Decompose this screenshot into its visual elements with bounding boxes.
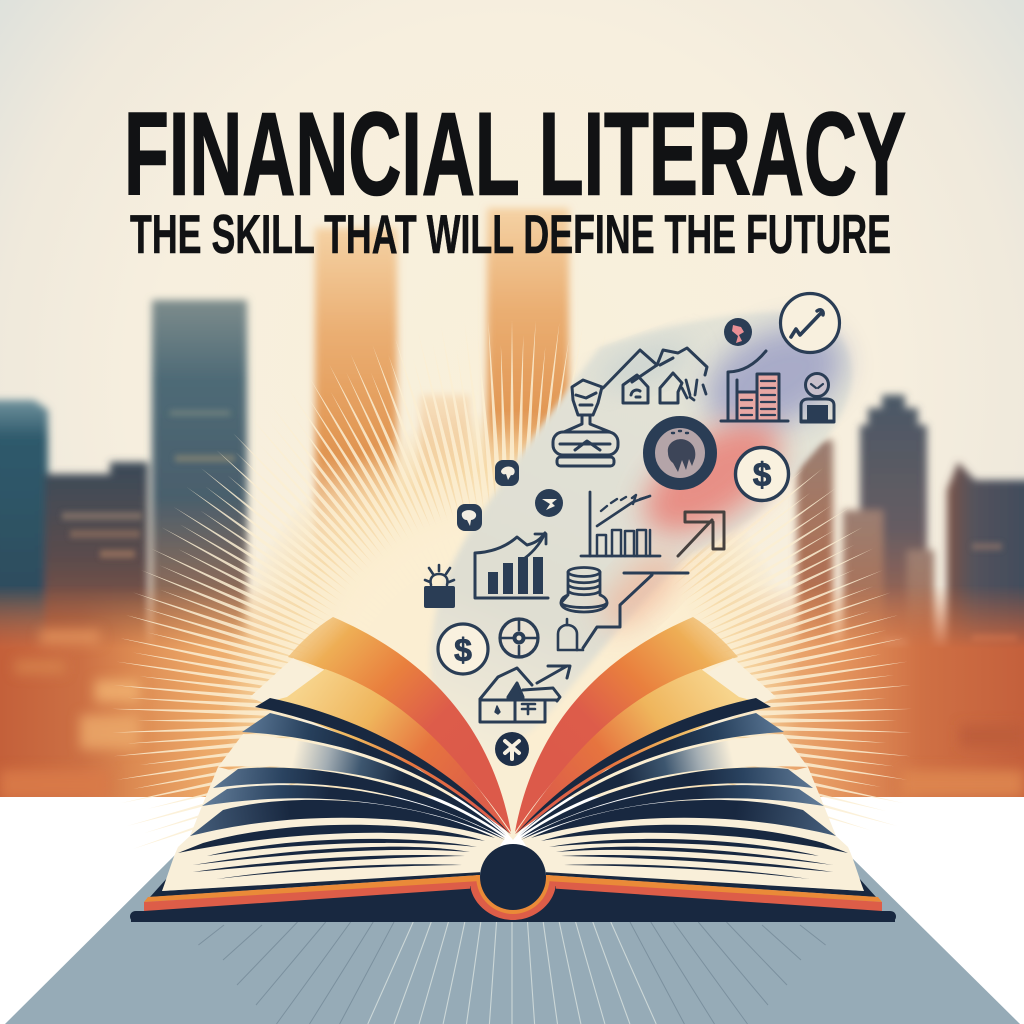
- open book: [130, 617, 896, 922]
- icon: houses: [603, 348, 707, 403]
- icon: growth circle: [780, 294, 840, 352]
- building window lights: [62, 410, 1017, 643]
- blurred city skyline: [0, 208, 1024, 690]
- spine: [470, 844, 556, 920]
- icon: person on book stack: [553, 380, 618, 466]
- icon: dollar coin top: [736, 448, 788, 500]
- table lines: centre: [368, 922, 656, 1024]
- warm city-light band: [0, 585, 1024, 797]
- icon: person at laptop: [801, 374, 834, 423]
- icon: stair line: [583, 573, 688, 648]
- icon: coin stack: [561, 568, 607, 612]
- base bar: [130, 886, 896, 922]
- table lines: sides: [198, 922, 826, 1024]
- swoosh behind icons: [430, 306, 860, 756]
- icon: building growth chart: [721, 351, 788, 421]
- icon cluster: [424, 294, 840, 766]
- icon: tag: [558, 619, 583, 650]
- background scene: [0, 0, 1024, 797]
- icon: growth chart: [475, 533, 548, 598]
- icon: small globe: [724, 318, 752, 346]
- icon: bar chart with trend: [581, 492, 660, 556]
- icon: small badges: [457, 460, 563, 531]
- icon: lightbulb box: [424, 565, 455, 608]
- icon: star badge: [495, 732, 529, 766]
- icon: dollar coin: [438, 624, 488, 674]
- icon: dollar coin top: $: [753, 456, 771, 493]
- icon: house with arrow: [480, 666, 570, 722]
- central glow: [232, 417, 792, 797]
- icon: dollar coin: $: [454, 632, 472, 668]
- icon: up-right arrow: [678, 512, 724, 556]
- centre gutter: [440, 750, 586, 840]
- left half of book: [131, 617, 511, 922]
- icon: target: [500, 619, 538, 657]
- icon: ring medallion: [649, 422, 711, 484]
- right half of book: [515, 617, 895, 922]
- table surface: [5, 852, 1020, 1024]
